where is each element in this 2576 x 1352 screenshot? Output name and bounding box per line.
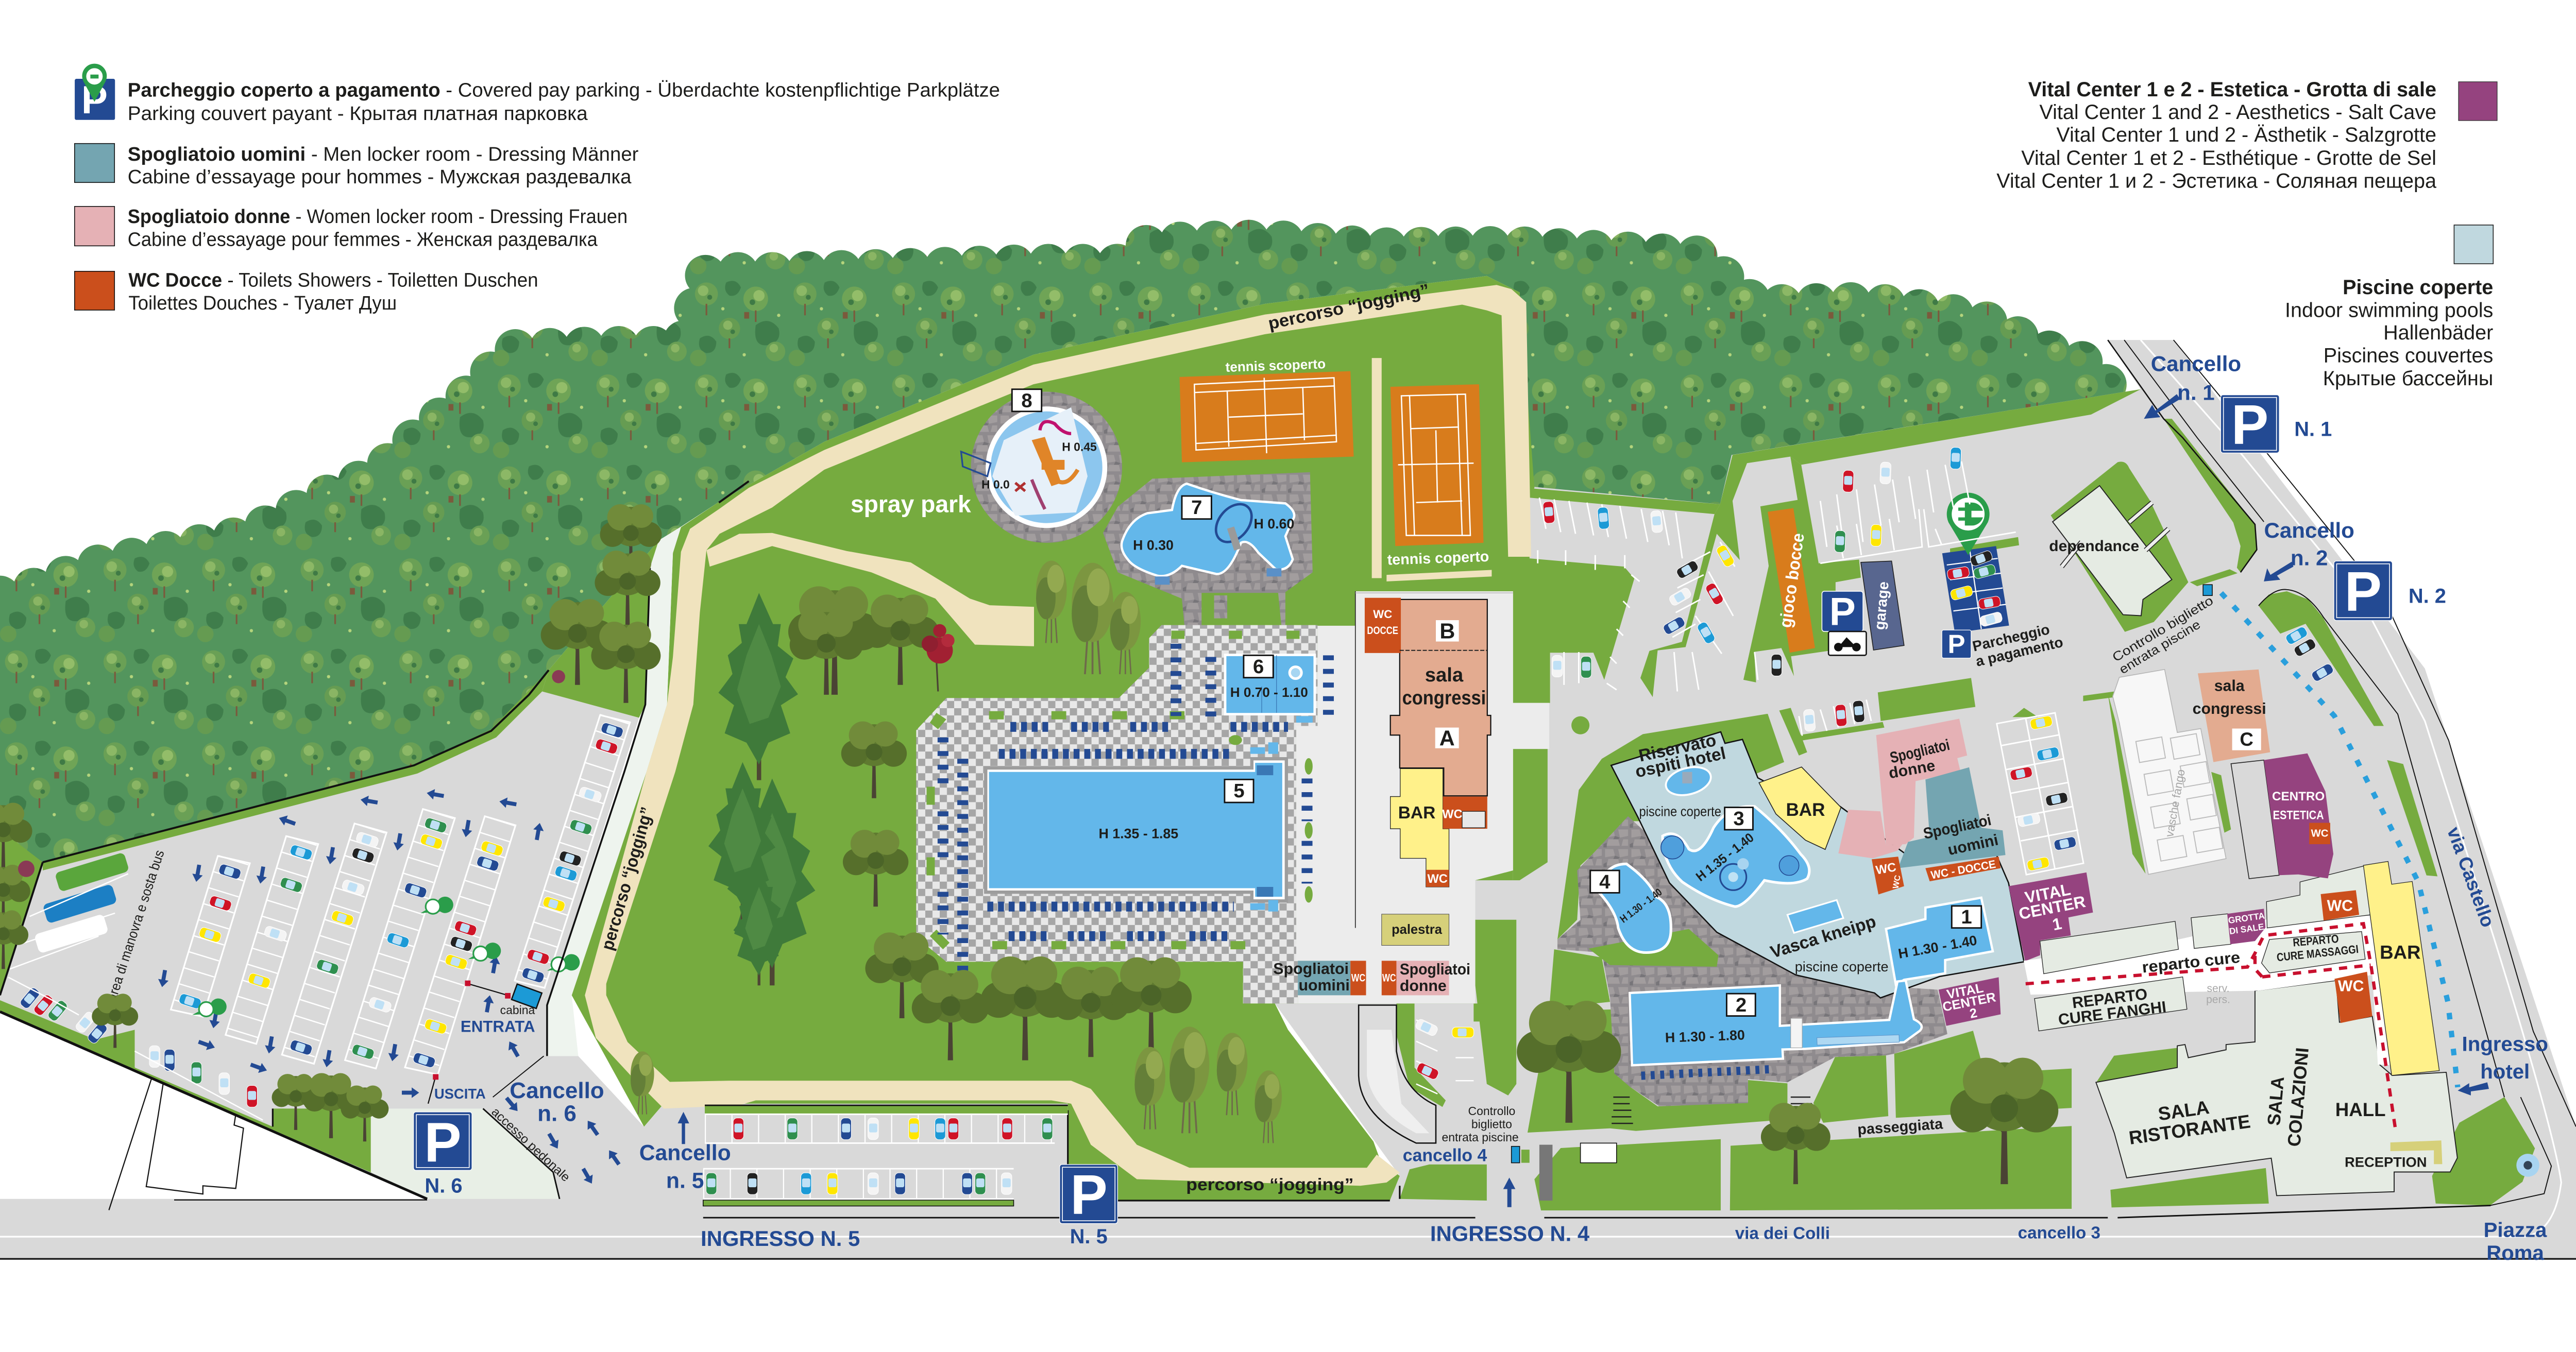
palestra: palestra: [1392, 922, 1443, 937]
hall: HALL: [2335, 1099, 2386, 1120]
grotta di sale: DI SALE: [2229, 921, 2265, 936]
lot 6 arrows: [157, 788, 623, 1186]
sala congressi C: sala: [2214, 677, 2245, 694]
legend vital center: Vital Center 1 и 2 - Эстетика - Соляная пещера: [1996, 169, 2436, 192]
parking sign 1: [2221, 393, 2279, 456]
piazza roma: Roma: [2486, 1241, 2544, 1264]
pool 5: [984, 757, 1288, 903]
parking sign 1: P: [2231, 393, 2268, 456]
controllo biglietto right: Controllo biglietto: [2110, 593, 2216, 665]
bar 1: BAR: [1398, 803, 1435, 823]
sala colazioni: COLAZIONI: [2284, 1047, 2313, 1148]
controllo biglietto right: [2110, 593, 2216, 677]
jogging label top: percorso “jogging”: [1266, 281, 1431, 334]
wc top: [2320, 890, 2359, 920]
moto sign: [1828, 631, 1866, 655]
reparto cure massaggi: [2262, 932, 2365, 973]
sala congressi C: C: [2240, 729, 2253, 750]
arrow gate 2: [2264, 562, 2294, 581]
vital center 2: 2: [1969, 1006, 1978, 1021]
spogliatoi uomini: uomini: [1299, 977, 1350, 994]
plaza: [1296, 591, 1549, 1003]
vasche fango: vasche fango: [2163, 768, 2188, 838]
legend indoor pools: Indoor swimming pools: [2285, 299, 2493, 321]
arrow gate 4: [1503, 1177, 1515, 1207]
park lawn: [572, 276, 1634, 1201]
vital center 2: CENTER: [1941, 990, 1997, 1015]
garage: [1861, 561, 1904, 650]
sala congressi C: congressi: [2193, 700, 2266, 717]
congress building: DOCCE: [1367, 625, 1398, 637]
cancello 4: cancello 4: [1403, 1145, 1487, 1165]
women's locker rooms: Spogliatoi: [1888, 737, 1952, 767]
legend indoor pools: Крытые бассейны: [2323, 367, 2493, 390]
cancello 2: n. 2: [2291, 545, 2328, 570]
pool 8 spray park: H 0.0: [981, 478, 1010, 491]
congress building: sala: [1425, 664, 1464, 686]
piazza roma: [2484, 1219, 2547, 1264]
pool 3: 3: [1733, 808, 1744, 830]
lot 5: [703, 1105, 1068, 1206]
legend left: Parcheggio coperto a pagamento - Covered pay parking - Überdachte kostenpflichtige Parkplätze: [128, 79, 1000, 101]
gate barrier lines: [493, 1056, 544, 1097]
parking sign garage: [1822, 590, 1863, 634]
legend left: Parking couvert payant - Крытая платная парковка: [128, 102, 588, 125]
legend left: Spogliatoio donne - Women locker room - Dressing Frauen: [128, 206, 628, 228]
bar 1: [1391, 768, 1487, 887]
riservato label: Riservato: [1637, 731, 1718, 766]
centro estetica: WC: [2311, 828, 2329, 839]
red dashed route: [2026, 923, 2396, 1133]
centro estetica: ESTETICA: [2273, 808, 2324, 822]
reparto cure fanghi: [2035, 977, 2187, 1031]
grotta di sale: [2227, 909, 2267, 944]
men's locker rooms: Spogliatoi: [1922, 812, 1993, 843]
lot border lines: [0, 481, 1400, 1201]
pool 7: H 0.60: [1253, 516, 1294, 532]
reparto cure massaggi: REPARTO: [2292, 932, 2339, 949]
sala ristorante: [2125, 1091, 2252, 1149]
parcheggio a pagamento label: Parcheggio: [1971, 621, 2051, 655]
spogliatoi uomini: [1273, 961, 1366, 995]
pool 2 loungers: [1641, 1069, 1771, 1076]
arrow gate 5: [677, 1112, 689, 1144]
controllo biglietto: [1442, 1104, 1519, 1144]
legend vital center: [1996, 78, 2497, 192]
legend left: Cabine d’essayage pour hommes - Мужская раздевалка: [128, 166, 632, 188]
sala ristorante: SALA: [2157, 1097, 2211, 1124]
passeggiata: passeggiata: [1857, 1116, 1944, 1138]
via dei colli: via dei Colli: [1735, 1224, 1830, 1243]
congress building: WC: [1373, 608, 1392, 621]
lot 6 cars: [19, 722, 624, 1107]
grotta di sale: GROTTA: [2228, 910, 2265, 926]
parking sign 5: P: [1070, 1163, 1108, 1226]
legend vital center: Vital Center 1 und 2 - Ästhetik - Salzgrotte: [2056, 124, 2436, 146]
reception: [2345, 1140, 2442, 1170]
ticket gate: [1512, 1143, 1617, 1201]
cars: [1415, 447, 2334, 1081]
sala ristorante: RISTORANTE: [2128, 1110, 2252, 1149]
tennis coperto: [1391, 384, 1483, 546]
small parking sign: P: [1947, 629, 1965, 659]
men's locker rooms: uomini: [1946, 831, 2000, 859]
cabina: [465, 981, 542, 1017]
cancello 2: Cancello: [2264, 518, 2354, 542]
cancello 5: n. 5: [666, 1169, 704, 1193]
flowering bush: [18, 670, 565, 877]
vasche fango: [2108, 670, 2231, 875]
n1 label: N. 1: [2294, 418, 2332, 441]
cancello 1: [2151, 351, 2241, 405]
uscita: USCITA: [434, 1086, 486, 1102]
ingresso hotel: Ingresso: [2462, 1032, 2548, 1055]
forest: [0, 240, 2141, 862]
parcheggio a pagamento label: [1971, 619, 2064, 670]
reparto cure label: reparto cure: [2141, 949, 2241, 977]
bus parking: [8, 852, 263, 1120]
wc lower: [2334, 972, 2372, 1023]
corridor: [2024, 916, 2391, 1065]
legend indoor pools: Hallenbäder: [2383, 321, 2493, 344]
reparto cure fanghi: CURE FANGHI: [2057, 998, 2167, 1029]
piscine coperte 1: piscine coperte: [1639, 803, 1721, 819]
legend left: Toilettes Douches - Туалет Душ: [128, 292, 397, 314]
bar 1: WC: [1442, 807, 1463, 820]
red maple tree: [922, 624, 955, 691]
control box: [2203, 585, 2212, 595]
sala colazioni: SALA: [2264, 1076, 2288, 1126]
congress building: [1365, 598, 1490, 796]
pool 8 spray park: 8: [1021, 390, 1032, 412]
parking grid center: [1997, 713, 2083, 875]
parking sign 6: [414, 1111, 472, 1173]
icon: covered parking: P: [81, 78, 108, 122]
vital center 2: [1939, 977, 2001, 1026]
legend left: WC Docce - Toilets Showers - Toiletten Duschen: [128, 269, 538, 291]
piscine coperte 2: piscine coperte: [1795, 959, 1888, 974]
sala colazioni: [2264, 1047, 2313, 1148]
cancello 3: cancello 3: [2018, 1224, 2100, 1243]
wc lower: WC: [2338, 978, 2364, 995]
bocce court: [1768, 508, 1815, 653]
n2 label: N. 2: [2409, 585, 2446, 608]
legend vital center: Vital Center 1 et 2 - Esthétique - Grotte de Sel: [2021, 147, 2436, 169]
cancello 6: n. 6: [537, 1101, 577, 1126]
pool 6: H 0.70 - 1.10: [1230, 684, 1308, 700]
parking sign 6: P: [424, 1111, 462, 1173]
bar 2: [1759, 767, 1841, 849]
fountain: [2516, 1154, 2539, 1177]
pool 3: H 1.35 - 1.40: [1693, 830, 1757, 884]
cancello 6: Cancello: [510, 1078, 604, 1103]
dotted walking route: [2221, 593, 2458, 1087]
palestra: [1382, 914, 1449, 945]
parking sign 2: [2334, 560, 2392, 623]
cancello 1: n. 1: [2177, 381, 2215, 405]
green triangle: [1589, 929, 1718, 967]
stone terrace: [1557, 816, 1947, 1106]
vasca kneipp: Vasca kneipp: [1768, 912, 1878, 962]
pool 4: [1590, 864, 1671, 952]
ramp: [1359, 1005, 1436, 1143]
legend indoor pools: [2285, 225, 2493, 390]
N6 pad: [371, 1108, 560, 1199]
pool 7: H 0.30: [1133, 538, 1174, 553]
reception: RECEPTION: [2345, 1154, 2427, 1170]
spogliatoi donne: [1382, 961, 1470, 995]
controllo biglietto: entrata piscine: [1442, 1131, 1519, 1144]
women's locker rooms: [1838, 718, 1967, 858]
parking sign 2: P: [2345, 560, 2382, 623]
controllo biglietto right: entrata piscine: [2117, 617, 2203, 677]
ingresso 4: INGRESSO N. 4: [1430, 1221, 1589, 1245]
legend indoor pools: Piscine coperte: [2343, 276, 2493, 299]
cancello 6: [510, 1078, 604, 1126]
pool 1: H 1.30 - 1.40: [1897, 932, 1978, 962]
accesso pedonale: accesso pedonale: [488, 1105, 572, 1185]
stairs: [1612, 1097, 1817, 1123]
percorso jogging path: [585, 285, 1531, 1186]
riservato label: ospiti hotel: [1634, 744, 1727, 782]
n5 label: N. 5: [1070, 1225, 1108, 1248]
legend indoor pools: Piscines couvertes: [2324, 344, 2493, 367]
n6 label: N. 6: [425, 1174, 463, 1197]
pool 1: 1: [1961, 906, 1972, 928]
cancello 5: [639, 1141, 731, 1193]
vital center 1: [2009, 872, 2093, 961]
spogliatoi uomini: Spogliatoi: [1273, 961, 1349, 978]
tennis scoperto: [1180, 371, 1354, 463]
jogging label left: percorso “jogging”: [598, 805, 657, 952]
controllo biglietto: Controllo: [1468, 1104, 1515, 1118]
covered pay parking: [1942, 546, 2009, 633]
pool 7: [1103, 472, 1313, 627]
parking lines south: [1416, 1020, 1473, 1094]
ingresso hotel: [2462, 1032, 2548, 1083]
centro estetica: CENTRO: [2272, 790, 2325, 803]
icon: ev charging pin: [1947, 493, 1990, 555]
ev charging markers: [192, 897, 580, 1017]
entrata: ENTRATA: [461, 1017, 535, 1035]
pool 1: [1886, 898, 1993, 985]
roads and parking ground: [0, 340, 2576, 1260]
controllo biglietto: biglietto: [1471, 1118, 1512, 1131]
cancello 2: [2264, 518, 2354, 570]
pool 4: 4: [1599, 871, 1611, 893]
sala congressi C: [2193, 670, 2270, 762]
spray park label: spray park: [851, 491, 971, 518]
parking lines north: [1538, 461, 2016, 736]
hotel building: [2096, 981, 2458, 1195]
lawns and green strips: [0, 389, 2535, 1210]
via castello: via Castello: [2443, 824, 2499, 930]
congress building: B: [1439, 619, 1455, 643]
spogliatoi donne: donne: [1400, 978, 1447, 995]
cancello 5: Cancello: [639, 1141, 731, 1166]
uscita: [428, 1074, 486, 1104]
reparto cure fanghi: REPARTO: [2071, 985, 2148, 1012]
sun terrace: [916, 625, 1317, 1003]
legend vital center: Vital Center 1 e 2 - Estetica - Grotta di sale: [2028, 78, 2436, 101]
yellow bar 3: BAR: [2380, 942, 2421, 963]
serv pers: pers.: [2206, 994, 2230, 1006]
pool 2: 2: [1736, 994, 1747, 1016]
dependance: dependance: [2049, 538, 2139, 555]
reparto cure massaggi: CURE MASSAGGI: [2276, 943, 2359, 964]
pool 2: H 1.30 - 1.80: [1665, 1027, 1745, 1046]
jogging label bottom: percorso “jogging”: [1186, 1175, 1354, 1194]
pool 5: 5: [1233, 780, 1245, 802]
tennis scoperto label: tennis scoperto: [1225, 356, 1326, 375]
road lines: [0, 340, 2576, 1259]
wc hall: [1872, 857, 2001, 895]
pool 3: [1661, 806, 1809, 906]
vital center 2: VITAL: [1945, 981, 1985, 1002]
yellow bar 3: [2363, 862, 2439, 1075]
wc hall: WC - DOCCE: [1930, 858, 1997, 882]
pool 2: [1630, 981, 1922, 1065]
icon: covered parking: [75, 64, 115, 122]
hotel pool small: [1663, 762, 1714, 800]
legend left: [75, 64, 1000, 314]
pool 5: H 1.35 - 1.85: [1098, 826, 1178, 842]
sun loungers: [987, 727, 1288, 936]
congress building: A: [1439, 726, 1455, 750]
women's locker rooms: donne: [1888, 757, 1937, 782]
spogliatoi donne: WC: [1382, 972, 1396, 984]
pool 8 spray park: H 0.45: [1062, 440, 1097, 453]
bocce court: gioco bocce: [1776, 532, 1808, 629]
pool 6: [1224, 654, 1316, 715]
legend left: Spogliatoio uomini - Men locker room - Dressing Männer: [128, 143, 639, 165]
reparto cure upper: [2040, 865, 2370, 974]
piazza roma: Piazza: [2484, 1219, 2547, 1242]
ingresso 5: INGRESSO N. 5: [701, 1226, 860, 1251]
ingresso hotel: hotel: [2480, 1060, 2530, 1083]
serv pers: serv.: [2207, 983, 2229, 995]
pool 4: H 1.30 - 1.40: [1618, 886, 1664, 925]
garage: garage: [1872, 581, 1892, 630]
bar 1: WC: [1428, 872, 1448, 885]
parking sign 5: [1060, 1163, 1117, 1226]
pedestrian strip: [547, 527, 681, 1056]
pool 7: 7: [1191, 497, 1202, 519]
vital center 1: 1: [2050, 914, 2063, 934]
bus area label: area di manovra e sosta bus: [104, 848, 167, 1003]
shrubs: [926, 630, 1313, 949]
parking sign garage: P: [1829, 590, 1856, 634]
arrow gate 1: [2144, 394, 2180, 419]
lot 6 parking columns: [171, 715, 630, 1074]
wc hall: WC: [1891, 874, 1903, 889]
tennis coperto label: tennis coperto: [1387, 549, 1489, 569]
pool 8 spray park: [961, 389, 1122, 543]
vital center 1: VITAL: [2023, 880, 2072, 907]
vital center 1: CENTER: [2017, 892, 2087, 923]
dependance: [2049, 461, 2188, 632]
pool 6: 6: [1253, 656, 1264, 678]
men's locker rooms: [1898, 767, 2006, 868]
parcheggio a pagamento label: a pagamento: [1974, 634, 2064, 670]
arrow hotel: [2458, 1082, 2489, 1096]
spogliatoi uomini: WC: [1351, 972, 1365, 984]
spogliatoi donne: Spogliatoi: [1400, 961, 1470, 978]
bottom-left building outline: [109, 1078, 427, 1210]
legend vital center: Vital Center 1 and 2 - Aesthetics - Salt Cave: [2039, 101, 2436, 124]
legend left: Cabine d’essayage pour femmes - Женская раздевалка: [128, 228, 598, 250]
bar 2: BAR: [1786, 800, 1825, 820]
trees: [0, 504, 2058, 1184]
cabina: cabina: [500, 1003, 535, 1017]
cancello 1: Cancello: [2151, 351, 2241, 375]
wc top: WC: [2327, 897, 2353, 914]
centro estetica: [2231, 754, 2333, 879]
congress building: congressi: [1402, 687, 1486, 709]
serv pers: [2206, 983, 2230, 1006]
small parking sign: [1942, 629, 1971, 659]
wc hall: WC: [1875, 860, 1897, 878]
indoor pools hall: [1611, 732, 2024, 998]
pool side basins: [1250, 716, 1313, 912]
